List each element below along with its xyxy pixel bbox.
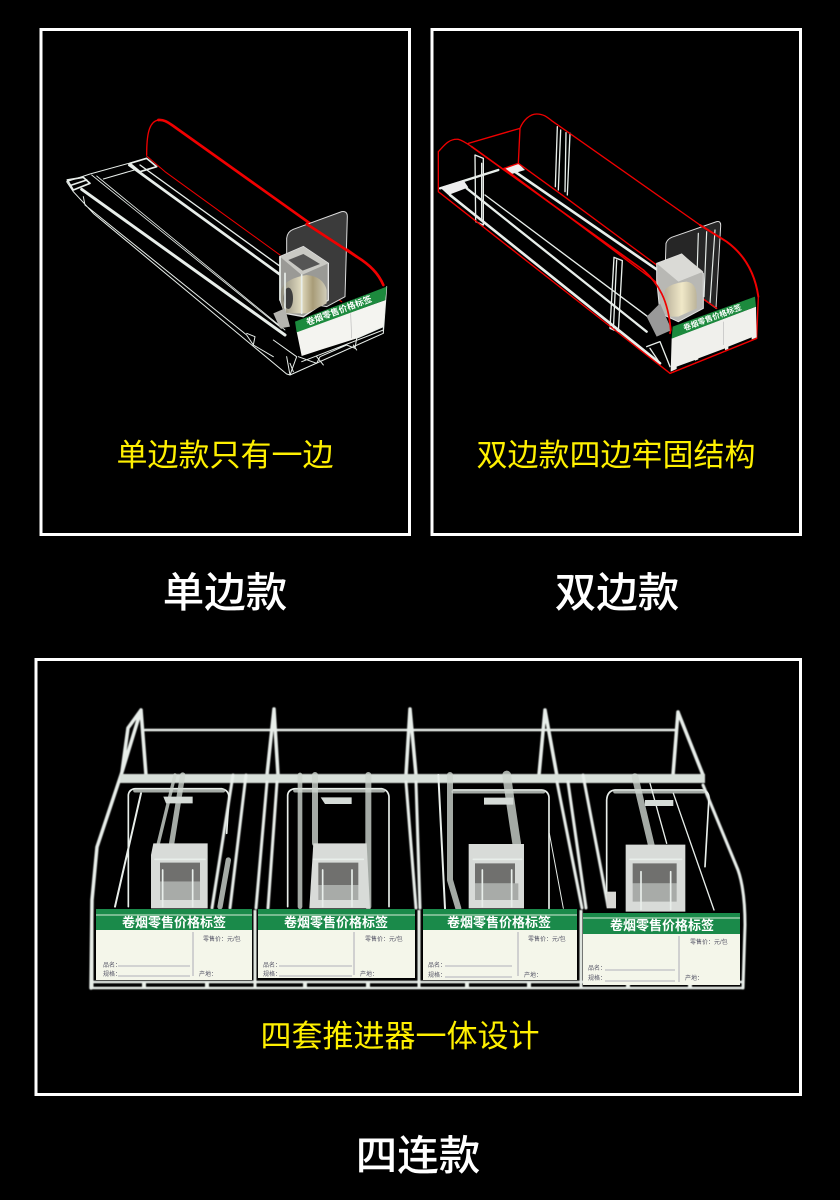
price label 3: 品名：	[428, 961, 446, 969]
price label 2	[258, 909, 415, 978]
product: single-side pusher	[67, 120, 387, 375]
price label 4: 规格：	[588, 974, 606, 982]
roller	[281, 275, 327, 313]
price label 4: 零售价：元/包	[690, 938, 728, 946]
bottom ticks	[144, 982, 690, 988]
heading: single-side: 单边款	[163, 569, 287, 616]
cross bar	[120, 774, 705, 783]
price label	[297, 300, 386, 356]
price label 2: 品名：	[263, 961, 281, 969]
white rails	[450, 195, 660, 363]
price label 1: 零售价：元/包	[203, 935, 241, 943]
price label 1: 品名：	[103, 961, 121, 969]
caption: 四套推进器一体设计	[260, 1019, 540, 1054]
product: single-side pusher: 卷烟零售价格标签	[304, 293, 373, 327]
heading: double-side: 双边款	[555, 569, 679, 616]
price label 1: 规格：	[103, 970, 121, 978]
price label 2: 卷烟零售价格标签	[284, 915, 388, 930]
uprights	[475, 155, 483, 225]
panel: double-side model	[432, 30, 800, 534]
price label 1	[96, 909, 252, 980]
heading: four-in-one: 四连款	[356, 1132, 480, 1179]
red outline	[438, 139, 758, 373]
price label 3	[423, 909, 577, 980]
end blocks	[67, 158, 157, 190]
pusher cube	[657, 254, 703, 322]
label base	[677, 337, 752, 371]
pusher cube	[280, 247, 328, 317]
product frame	[91, 709, 745, 988]
red edge	[147, 120, 158, 155]
pusher unit 3	[438, 775, 563, 908]
price label 2: 规格：	[263, 970, 281, 978]
back plate	[665, 222, 721, 308]
pusher unit 1	[115, 775, 229, 908]
rails	[82, 189, 285, 335]
price label 4: 品名：	[588, 964, 606, 972]
price label 4: 卷烟零售价格标签	[610, 918, 714, 933]
panel: four-in-one model	[36, 660, 800, 1094]
pusher unit 4	[607, 777, 714, 912]
caption: 双边款四边牢固结构	[476, 438, 756, 473]
price label 3: 零售价：元/包	[528, 935, 566, 943]
price label 1: 卷烟零售价格标签	[122, 915, 226, 930]
panel: single-side model	[41, 30, 410, 534]
price label 2: 产地：	[360, 970, 378, 978]
product: double-side pusher: 卷烟零售价格标签	[682, 302, 743, 333]
price label 3: 规格：	[428, 971, 446, 979]
label base	[290, 327, 383, 372]
roller	[664, 282, 697, 317]
price label	[671, 307, 757, 372]
pusher unit 2	[288, 775, 389, 908]
price label 3: 卷烟零售价格标签	[447, 915, 551, 930]
bottom rail	[92, 982, 742, 988]
product: double-side pusher	[438, 114, 758, 373]
price label 4: 产地：	[685, 974, 703, 982]
price label 4	[583, 913, 740, 985]
long slanted rails	[212, 775, 608, 908]
caption: 单边款只有一边	[116, 438, 334, 473]
tray outline	[67, 159, 387, 375]
price label 3: 产地：	[524, 971, 542, 979]
back plate	[287, 212, 347, 307]
price label 1: 产地：	[199, 970, 217, 978]
price label 2: 零售价：元/包	[365, 935, 403, 943]
